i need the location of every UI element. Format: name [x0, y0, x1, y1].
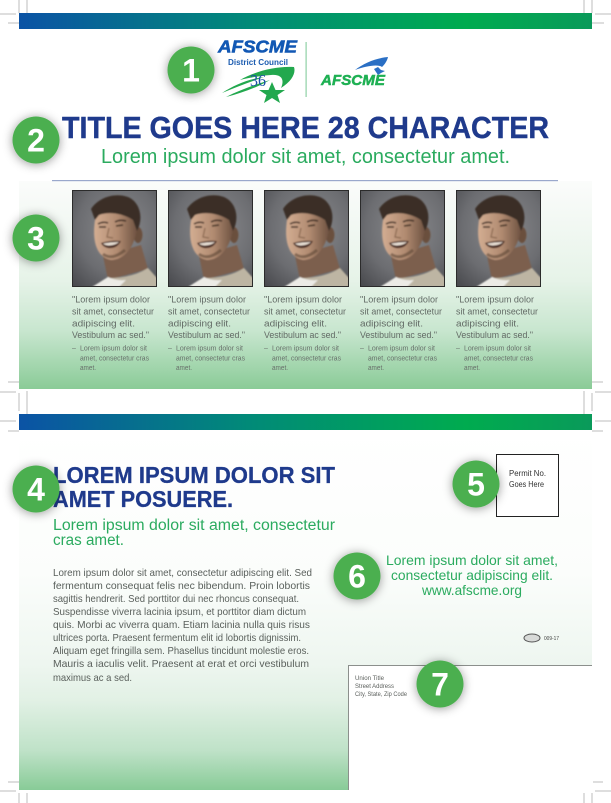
badge 4 [12, 466, 60, 512]
permit box [496, 454, 558, 516]
badge 5 [452, 460, 500, 508]
quote 3: sit amet, consectetur [264, 306, 347, 318]
return address [355, 675, 407, 698]
second gradient bar [19, 414, 592, 430]
quote 3: Vestibulum ac sed." [264, 330, 341, 341]
return address: City, State, Zip Code [355, 691, 407, 698]
attribution 3: amet, consectetur cras [272, 356, 341, 362]
attribution 5: amet. [464, 365, 480, 372]
attribution 4: Lorem ipsum dolor sit [368, 346, 435, 352]
heading: AMET POSUERE. [53, 486, 233, 512]
attribution 5: – [456, 346, 460, 352]
body text: sagittis hendrerit. Sed porttitor dui nec rhoncus consequat. [53, 594, 299, 605]
attribution 1: amet. [80, 365, 96, 372]
body text: maximus ac a sed. [53, 673, 132, 684]
quote 1: "Lorem ipsum dolor [72, 294, 151, 306]
badge 4: 4 [27, 472, 45, 508]
logo: AFSCME District Council 36: 36 [250, 71, 266, 90]
badge 3 [12, 214, 60, 262]
permit box: Goes Here [509, 479, 544, 489]
attribution 1: Lorem ipsum dolor sit [80, 346, 147, 352]
card 3 [264, 190, 349, 372]
union bug [524, 634, 559, 642]
quote 5: Vestibulum ac sed." [456, 330, 533, 341]
attribution 1 [72, 346, 149, 372]
quote 2: "Lorem ipsum dolor [168, 294, 247, 306]
badge 6: 6 [348, 558, 366, 594]
badge 1: 1 [182, 52, 200, 88]
attribution 2: amet. [176, 365, 192, 372]
quote 4: "Lorem ipsum dolor [360, 294, 439, 306]
card 4 [360, 190, 445, 372]
quote 5: adipiscing elit. [456, 318, 519, 330]
quote 2: sit amet, consectetur [168, 306, 251, 318]
logo: AFSCME District Council 36 [217, 36, 298, 103]
photo 5 [456, 190, 541, 287]
call to action: Lorem ipsum dolor sit amet, [386, 552, 558, 568]
body text: Lorem ipsum dolor sit amet, consectetur adipiscing elit. Sed [53, 568, 312, 579]
quote 4 [360, 294, 443, 341]
logo: AFSCME: AFSCME [320, 72, 386, 89]
photo 3 [264, 190, 349, 287]
body text: Suspendisse viverra lacinia ipsum, et porttitor diam dictum [53, 607, 306, 618]
heading: LOREM IPSUM DOLOR SIT [53, 462, 335, 488]
quote 4: adipiscing elit. [360, 318, 423, 330]
card 2 [168, 190, 253, 372]
quote 5: "Lorem ipsum dolor [456, 294, 535, 306]
attribution 3: amet. [272, 365, 288, 372]
body text: ultrices porta. Praesent fermentum elit id lobortis dignissim. [53, 633, 301, 644]
body text: Aliquam eget fringilla sem. Phasellus tincidunt molestie eros. [53, 646, 309, 657]
body text: fermentum consequat felis nec bibendum. Proin lobortis [53, 581, 310, 592]
subheading: cras amet. [53, 532, 124, 549]
panel: mailing address [348, 666, 592, 790]
permit box: Permit No. [509, 468, 546, 478]
logo: AFSCME [320, 57, 388, 89]
quote 2: Vestibulum ac sed." [168, 330, 245, 341]
card 5 [456, 190, 541, 372]
logo: AFSCME District Council 36: AFSCME [217, 36, 298, 56]
quote 3: "Lorem ipsum dolor [264, 294, 343, 306]
attribution 3: – [264, 346, 268, 352]
title: TITLE GOES HERE 28 CHARACTER [62, 110, 549, 145]
attribution 1: – [72, 346, 76, 352]
heading [53, 462, 335, 512]
badge 5: 5 [467, 466, 485, 502]
quote 2: adipiscing elit. [168, 318, 231, 330]
union bug: 009-17 [544, 636, 559, 642]
attribution 4: – [360, 346, 364, 352]
badge 2: 2 [27, 122, 45, 158]
quote 4: sit amet, consectetur [360, 306, 443, 318]
photo 1 [72, 190, 157, 287]
attribution 4: amet. [368, 365, 384, 372]
badge 3: 3 [27, 220, 45, 256]
return address: Union Title [355, 675, 384, 682]
quote 1 [72, 294, 155, 341]
quote 1: sit amet, consectetur [72, 306, 155, 318]
attribution 3: Lorem ipsum dolor sit [272, 346, 339, 352]
top gradient bar [19, 13, 592, 29]
quote 3 [264, 294, 347, 341]
attribution 1: amet, consectetur cras [80, 356, 149, 362]
logo: AFSCME District Council 36: District Council [228, 57, 288, 67]
panel: back background [19, 430, 592, 790]
badge 7 [416, 660, 464, 708]
body text: quis. Morbi ac viverra quam. Etiam lacinia nulla quis risus [53, 620, 310, 631]
quote 4: Vestibulum ac sed." [360, 330, 437, 341]
quote 1: Vestibulum ac sed." [72, 330, 149, 341]
photo 2 [168, 190, 253, 287]
subheading [53, 517, 335, 549]
subheading: Lorem ipsum dolor sit amet, consectetur [53, 517, 335, 534]
body text [53, 568, 312, 684]
quote 2 [168, 294, 251, 341]
quote 3: adipiscing elit. [264, 318, 327, 330]
call to action [386, 552, 558, 598]
logo divider [306, 42, 307, 97]
subtitle: Lorem ipsum dolor sit amet, consectetur amet. [101, 146, 510, 168]
attribution 2: amet, consectetur cras [176, 356, 245, 362]
attribution 3 [264, 346, 341, 372]
panel: front photo strip background [19, 181, 592, 389]
attribution 4: amet, consectetur cras [368, 356, 437, 362]
return address: Street Address [355, 683, 395, 690]
badge 1 [168, 46, 214, 94]
attribution 5: amet, consectetur cras [464, 356, 533, 362]
badge 2 [12, 116, 60, 164]
card 1 [72, 190, 157, 372]
body text: Mauris a iaculis velit. Praesent at erat et orci vestibulum [53, 659, 309, 670]
badge 6 [334, 552, 380, 600]
quote 5 [456, 294, 539, 341]
call to action: consectetur adipiscing elit. [391, 567, 553, 583]
attribution 5 [456, 346, 533, 372]
attribution 2: – [168, 346, 172, 352]
attribution 5: Lorem ipsum dolor sit [464, 346, 531, 352]
badge 7: 7 [431, 666, 449, 702]
attribution 2: Lorem ipsum dolor sit [176, 346, 243, 352]
quote 5: sit amet, consectetur [456, 306, 539, 318]
attribution 2 [168, 346, 245, 372]
photo 4 [360, 190, 445, 287]
attribution 4 [360, 346, 437, 372]
call to action: www.afscme.org [421, 582, 522, 598]
quote 1: adipiscing elit. [72, 318, 135, 330]
